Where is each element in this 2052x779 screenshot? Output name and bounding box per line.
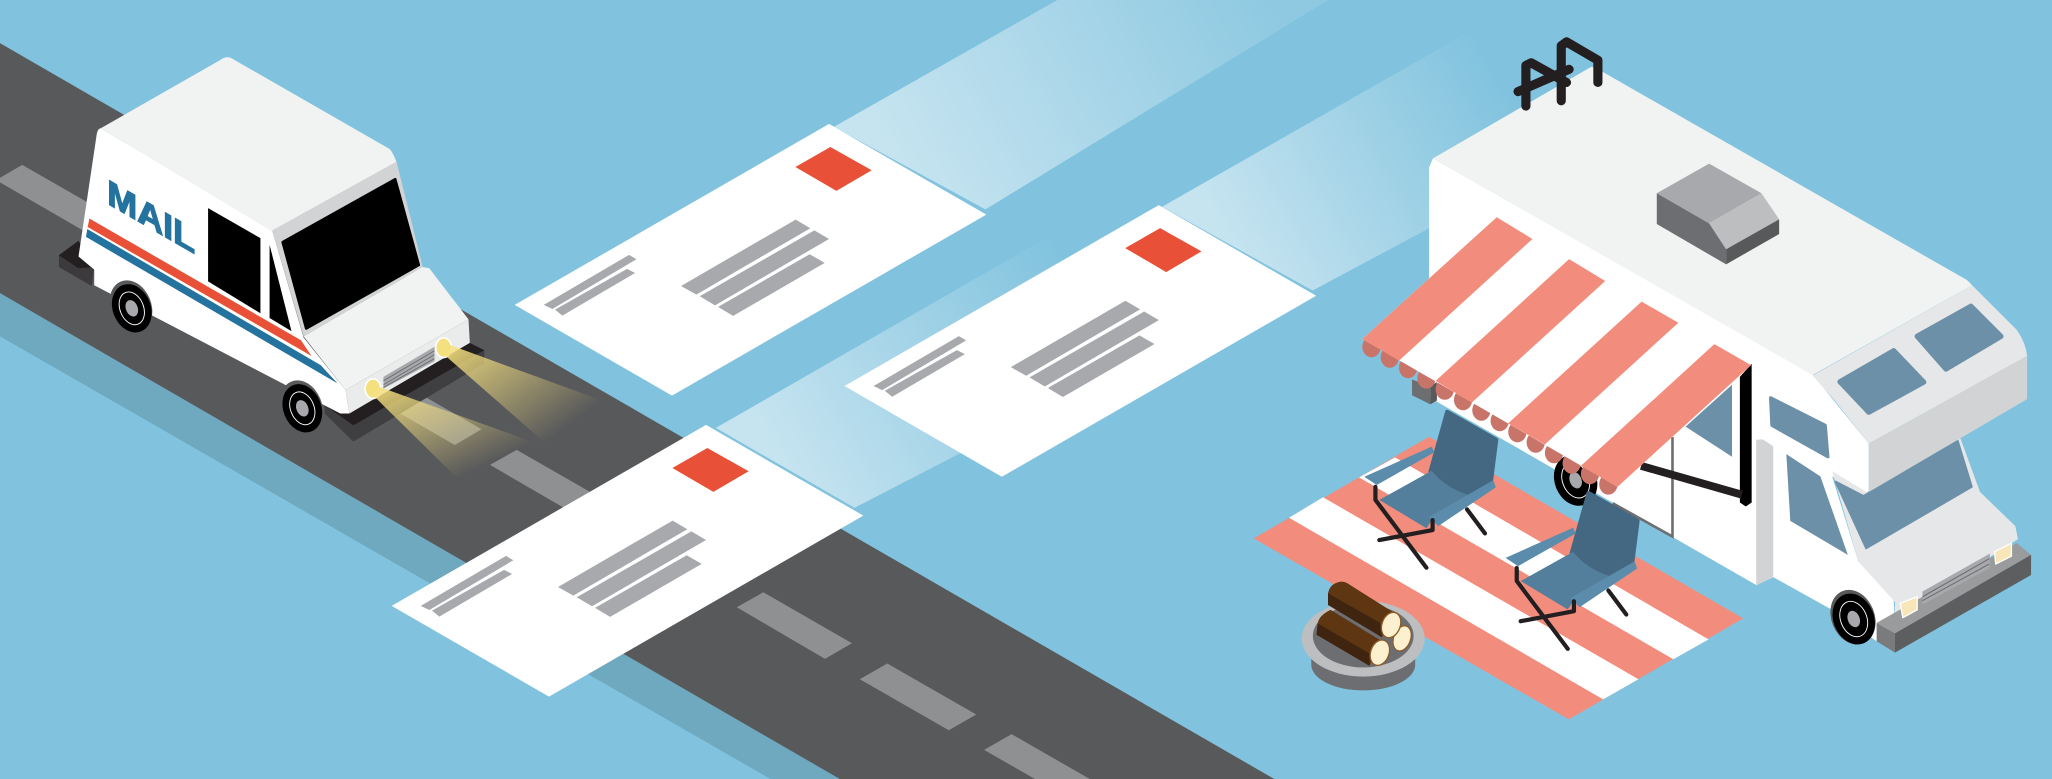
RV front wheel [1822,583,1884,651]
light trail: middle letter [1162,26,1636,291]
upper side window [1771,398,1828,457]
chair: left [1364,412,1496,568]
RV windshield [1836,441,1972,548]
rear RV wheel [1546,448,1605,512]
RV headlights [1900,543,2011,618]
awning [1362,217,1751,487]
road [0,43,1276,779]
overhang window: left [1840,351,1924,412]
rear wheel [102,274,160,339]
cab overhang [1813,285,2027,492]
van front panel [345,319,470,414]
awning post [1412,380,1437,404]
windshield frame [272,162,423,336]
letter: middle [844,205,1316,477]
chair: right [1506,493,1638,649]
RV roof [1433,67,1972,375]
headlight beam: left [369,386,534,479]
logs [1317,582,1415,668]
door window [1686,385,1732,457]
roof ladder [1518,42,1598,106]
light trail: top letter [834,0,1328,209]
mail van [59,57,484,442]
cab front [1832,438,2018,618]
striped rug [1254,437,1743,719]
road shadow [0,293,841,779]
overhang window: right [1917,306,2001,369]
van roof [101,57,397,232]
blue stripe [86,229,338,383]
RV grille [1922,554,1990,605]
MAIL lettering: MAIL [107,172,195,262]
awning pole [1740,364,1752,506]
letter: top [515,124,986,396]
awning scallops [1362,336,1618,495]
lower side window [1786,454,1848,555]
side window [208,208,260,313]
RV bumper [1877,543,2031,653]
hood [304,267,469,390]
door window [270,245,291,331]
headlight beam: right [440,344,602,442]
rear bumper [59,241,94,286]
RV body side [1429,158,1895,641]
windshield [283,179,419,328]
letter: bottom [392,425,863,697]
RV [1362,42,2031,653]
red stripe [88,219,311,356]
side trim strip [1756,439,1773,586]
roof vent [1657,164,1779,264]
fire pit with logs [1302,582,1425,690]
door outline [1613,437,1672,537]
van side [79,128,349,414]
front wheel [273,374,330,439]
front bumper [325,342,484,442]
headlights [365,338,451,398]
light trail: bottom letter [716,222,1230,508]
grille [383,347,434,389]
awning arm [1641,466,1742,495]
